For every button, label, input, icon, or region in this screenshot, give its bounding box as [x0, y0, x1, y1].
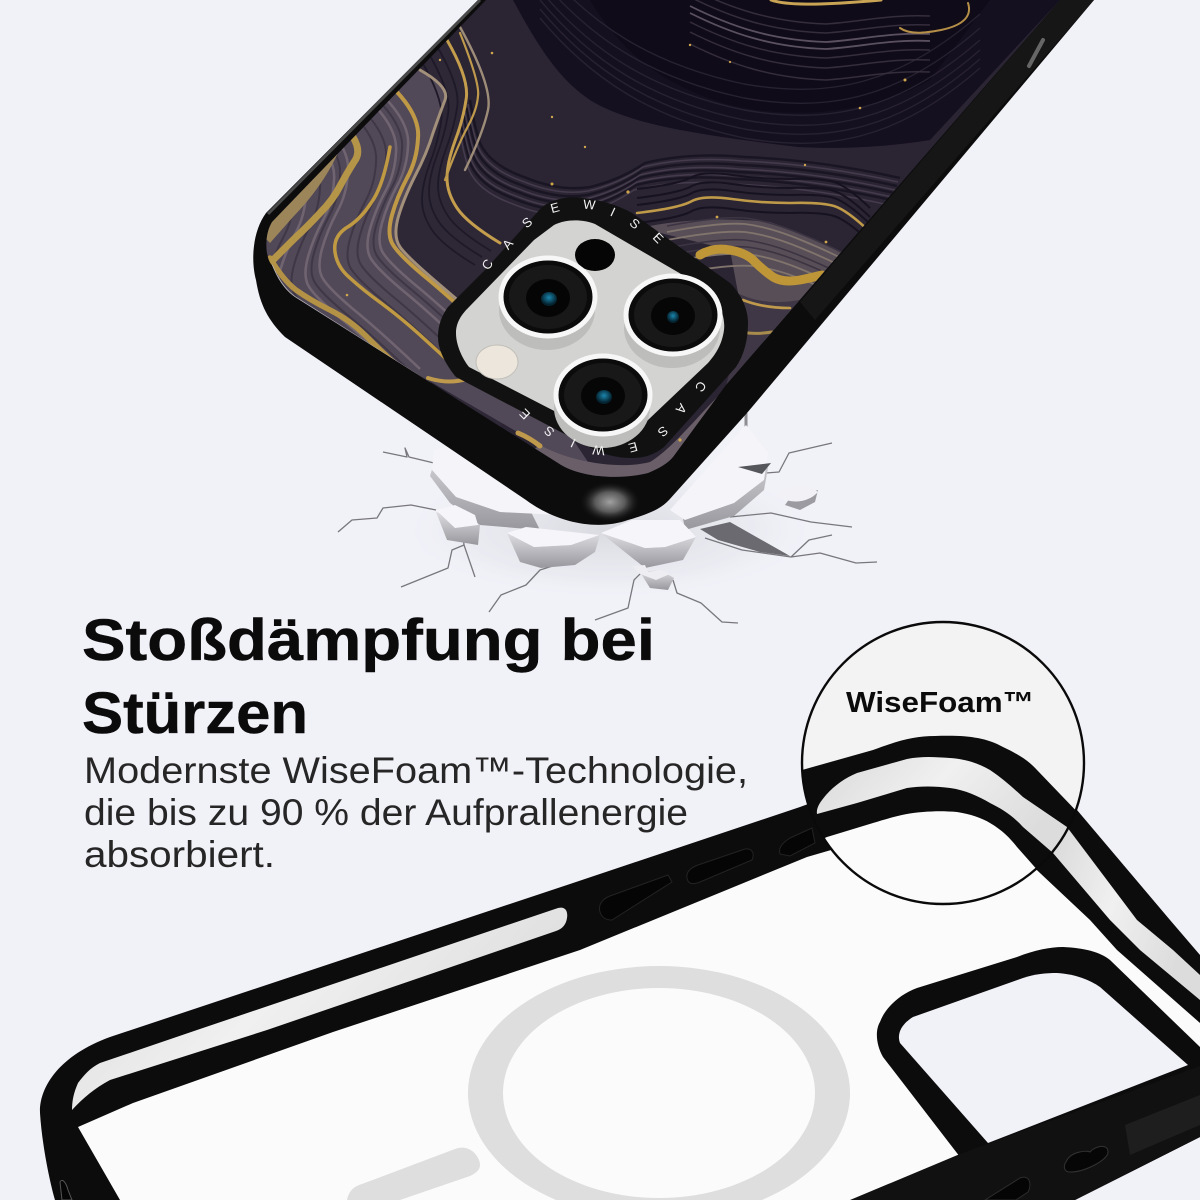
deep core — [593, 4, 928, 112]
CASEWISE lettering — [478, 197, 710, 458]
MagSafe alignment bar — [347, 1148, 480, 1200]
magnified clear panel — [825, 811, 1036, 903]
glass rim reflection — [272, 265, 430, 383]
upper rib band — [690, 6, 930, 49]
CASEWISE lettering: I — [568, 436, 578, 451]
crack lines — [338, 413, 877, 623]
crater soft shadow — [400, 460, 820, 600]
magnified case corner — [803, 736, 1075, 868]
lower right bumper — [850, 1066, 1200, 1200]
left plate — [430, 440, 560, 530]
body text: Modernste WiseFoam™-Technologie, — [84, 750, 748, 791]
CASEWISE lettering: S — [654, 423, 671, 440]
chunk left small — [436, 505, 480, 545]
CASEWISE lettering: E — [516, 406, 533, 423]
dark crack wedge — [700, 522, 790, 556]
marble back — [266, 0, 1060, 477]
CASEWISE lettering: A — [499, 236, 516, 252]
middle rib band — [461, 100, 900, 210]
CASEWISE lettering: S — [519, 214, 536, 231]
magnified foam strip — [817, 757, 1067, 860]
core ribs — [540, 0, 980, 143]
right tan ribs — [667, 222, 838, 284]
CASEWISE lettering: W — [591, 442, 605, 458]
gold veins — [270, 0, 969, 446]
magnified frame — [803, 736, 1075, 868]
port slot — [1064, 1146, 1108, 1172]
bumper right edge tone — [800, 0, 1094, 320]
left foam strip — [72, 908, 567, 1110]
dark centre — [513, 0, 1060, 148]
lens 3 — [554, 356, 650, 448]
silver camera plateau — [456, 220, 724, 437]
ribs above gold line — [637, 172, 870, 232]
lower right dark field — [726, 294, 800, 384]
heading — [82, 608, 655, 746]
heading: Stürzen — [82, 681, 308, 746]
top phone in marble case — [240, 0, 1100, 525]
magnifier fill — [802, 622, 1084, 904]
lens 1 — [499, 258, 595, 350]
right tan field — [650, 220, 841, 340]
dark ribs between veins — [422, 48, 491, 265]
CASEWISE lettering: W — [583, 197, 597, 213]
CASEWISE lettering: E — [627, 439, 639, 456]
WiseFoam label: WiseFoam™ — [846, 687, 1034, 719]
CASEWISE lettering: C — [478, 256, 496, 273]
clear back panel — [78, 830, 1200, 1200]
side buttons — [599, 828, 815, 920]
CASEWISE lettering: E — [650, 229, 667, 246]
camera cutout opening — [899, 973, 1188, 1143]
body text: die bis zu 90 % der Aufprallenergie — [84, 792, 688, 833]
chunk center left — [507, 527, 600, 568]
CASEWISE lettering: I — [608, 204, 618, 219]
bumper texture — [1125, 1095, 1200, 1155]
chunk center right — [601, 520, 696, 568]
lens 2 — [624, 276, 720, 368]
CASEWISE lettering: S — [541, 423, 557, 440]
CASEWISE lettering: C — [692, 378, 710, 395]
camera bump — [438, 197, 748, 458]
CASEWISE lettering: E — [549, 199, 561, 216]
CASEWISE lettering: A — [673, 401, 690, 417]
bumper left edge sheen — [268, 0, 480, 214]
bronze corner — [266, 154, 338, 243]
black bumper — [253, 0, 1094, 525]
lavender ribs — [278, 100, 446, 370]
heading: Stoßdämpfung bei — [82, 608, 655, 673]
magnifier outline — [802, 622, 1084, 904]
WiseFoam magnifier callout — [795, 622, 1085, 905]
bumper highlight — [580, 482, 640, 522]
chunk right small — [776, 486, 818, 510]
right foam strip — [1053, 827, 1200, 1000]
MagSafe ring — [468, 966, 850, 1200]
CASEWISE lettering: S — [627, 215, 643, 232]
lavender left field — [260, 70, 600, 480]
clear case — [40, 770, 1200, 1200]
camera cutout frame — [877, 947, 1200, 1160]
body text: absorbiert. — [84, 834, 275, 875]
right plate — [670, 425, 771, 530]
gold specks — [346, 44, 906, 442]
dark field left of centre — [268, 42, 500, 426]
bump ring — [438, 197, 748, 458]
side button glint — [1029, 40, 1043, 66]
flash — [476, 345, 518, 379]
left side slot — [60, 1180, 72, 1200]
body text — [84, 750, 748, 875]
brown rim — [535, 398, 717, 477]
button recess — [985, 1177, 1030, 1200]
black frame silhouette — [40, 770, 1200, 1200]
microphone hole — [575, 239, 615, 271]
impact crater with cracks — [338, 413, 877, 623]
chunk bottom small — [632, 565, 674, 590]
